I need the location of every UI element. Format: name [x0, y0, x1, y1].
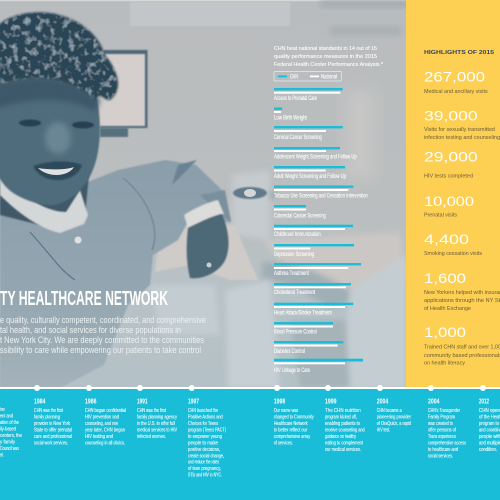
chart legend: CHN: [290, 74, 298, 80]
measure: diabetes control: [274, 341, 343, 355]
timeline entry: 2004 OraQuick: 2004: [377, 398, 388, 406]
stat: 39,000: Visits for sexually transmitted: [424, 127, 495, 133]
timeline entry: 2004 OraQuick: pioneering provider: [377, 414, 411, 420]
panel: yellow highlights background: [406, 0, 500, 388]
stat: 1,000: 1,000: [424, 324, 466, 340]
measure: heart attack and stroke treatment: Heart Attack/Stroke Treatment: [274, 310, 332, 317]
timeline entry: founding (cut off): ation of the: [0, 420, 19, 426]
timeline entry: 1998: 1998: [274, 398, 285, 406]
stat: 10,000: [424, 193, 474, 219]
timeline entry: 1998: [274, 398, 314, 446]
timeline entry: 1986: CHN began confidential: [85, 408, 126, 414]
timeline entry: 1998: Our name was: [274, 408, 298, 414]
measure: adolescent weight screening: Adolescent Weight Screening and Follow Up: [274, 154, 357, 161]
timeline entry: 1998: of services.: [274, 440, 293, 446]
timeline entry: 1986: year later, CHN began: [85, 428, 125, 434]
timeline entry: 1999: guidance on healthy: [325, 434, 356, 440]
timeline entry: 2004 Transgender program: Family Program: [428, 414, 455, 420]
timeline entry: founding (cut off): ent and: [0, 414, 13, 420]
timeline entry: 1991: 1991: [137, 398, 148, 406]
timeline entry: 1997: positive decisions,: [188, 447, 220, 453]
timeline entry: 2004 Transgender program: [427, 398, 466, 460]
measure: HIV linkage to care: HIV Linkage to Care: [274, 367, 310, 374]
measure: depression screening: Depression Screening: [274, 251, 314, 258]
stat: 1,600: of Health Exchange: [424, 306, 471, 312]
timeline entry: 1986: counseling in all clinics.: [85, 440, 125, 446]
timeline entry: 1984: care and professional: [34, 434, 72, 440]
stat: 4,400: 4,400: [424, 231, 469, 247]
measure: adult weight screening: [274, 166, 346, 180]
timeline entry: 1999: our medical services.: [325, 447, 361, 453]
timeline entry: 2004 Transgender program: comprehensive access: [428, 440, 466, 446]
timeline entry: 1999: enabling patients to: [325, 421, 360, 427]
stat: 29,000: [424, 149, 478, 180]
measure: HIV linkage to care: [274, 359, 363, 374]
measure: tobacco use screening: [274, 186, 368, 200]
timeline entry: 1997: create social change,: [188, 454, 224, 460]
mission paragraph: t New York City. We are deeply committed to the communities: [0, 335, 205, 345]
timeline entry: 2004 Transgender program: CHN's Transgender: [428, 408, 460, 414]
timeline entry: 2012 (cut off): [479, 398, 500, 453]
timeline entry: 1998: Healthcare Network: [274, 421, 308, 427]
timeline entry: 1997: CHN launched the: [188, 408, 218, 414]
timeline entry: 1984: family planning: [34, 414, 60, 420]
performance intro text: Federal Health Center Performance Analysis.*: [274, 62, 384, 68]
stat: 1,000: community based professionals: [424, 353, 500, 359]
timeline entry: 2004 OraQuick: of OraQuick, a rapid: [377, 421, 411, 427]
stat: 1,600: 1,600: [424, 270, 466, 286]
timeline entry: founding (cut off): ed.: [0, 452, 4, 458]
timeline entry: 1999: 1999: [325, 398, 337, 406]
heading: community healthcare network: TY HEALTHCARE NETWORK: [0, 288, 168, 310]
timeline entry: 1998: changed to Community: [274, 414, 314, 420]
measure: colorectal cancer screening: Colorectal Cancer Screening: [274, 212, 326, 219]
timeline entry: 2012 (cut off): 2012: [479, 398, 489, 406]
stat: 267,000: Medical and ancillary visits: [424, 89, 488, 95]
timeline entry: 1999: eating to complement: [325, 440, 363, 446]
chart legend: National: [321, 74, 337, 80]
measure: tobacco use screening: Tobacco Use Screening and Cessation Intervention: [274, 193, 368, 200]
timeline entry: 1984: CHN was the first: [34, 408, 63, 414]
timeline entry: 1991: family planning agency: [137, 414, 177, 420]
measure: low birth weight: Low Birth Weight: [274, 115, 307, 122]
stat: 10,000: 10,000: [424, 193, 474, 209]
timeline entry: 1986: [85, 398, 126, 446]
stat: 1,000: [424, 324, 500, 367]
timeline entry: 1986: 1986: [85, 398, 97, 406]
timeline entry: 1984: [34, 398, 72, 446]
timeline entry: 2004 OraQuick: HIV test.: [377, 428, 390, 434]
timeline entry: 1986: HIV prevention and: [85, 414, 119, 420]
measure: cervical cancer screening: [274, 126, 343, 141]
measure: childhood immunization: [274, 225, 353, 238]
timeline entry: 1997: program (Teens PACT): [188, 428, 226, 434]
measure: colorectal cancer screening: [274, 205, 326, 219]
stat: 4,400: [424, 231, 482, 257]
timeline entry: founding (cut off): hen: [0, 407, 5, 413]
stat: 29,000: 29,000: [424, 149, 478, 165]
measure: diabetes control: Diabetes Control: [274, 348, 305, 355]
timeline entry: 1997: STIs and HIV in NYC.: [188, 472, 222, 478]
timeline entry: 1984: provider in New York: [34, 421, 70, 427]
timeline band: [0, 389, 500, 500]
measure: asthma treatment: [274, 263, 361, 277]
measure: depression screening: [274, 244, 354, 258]
timeline entry: 2004 Transgender program: 2004: [428, 398, 440, 406]
timeline entry: 1997: and reduce the rates: [188, 460, 219, 466]
timeline entry: 1984: State to offer prenatal: [34, 428, 72, 434]
measure: cervical cancer screening: Cervical Cancer Screening: [274, 134, 322, 141]
performance intro text: CHN beat national standards in 14 out of 15: [274, 46, 377, 52]
timeline entry: 1991: in the U.S. to offer full: [137, 421, 175, 427]
chart legend: [274, 72, 342, 81]
stat: 29,000: HIV tests completed: [424, 174, 473, 180]
timeline entry: 2004 Transgender program: Trans experience: [428, 434, 456, 440]
measure: blood pressure control: [274, 322, 333, 336]
timeline entry: 1999: receive counseling and: [325, 428, 365, 434]
timeline line and year markers: [0, 385, 500, 391]
timeline entry: 1991: medical services to HIV: [137, 428, 177, 434]
timeline entry: 1999: The CHN nutrition: [325, 408, 361, 414]
measure: cholesterol treatment: [274, 283, 351, 296]
timeline entry: founding (cut off): y family: [0, 440, 15, 446]
timeline entry: 2004 Transgender program: to healthcare and: [428, 447, 458, 453]
stat: 39,000: 39,000: [424, 108, 478, 124]
timeline entry: 1999: [325, 398, 365, 453]
timeline entry: founding (cut off): [0, 407, 22, 458]
measure: access to prenatal care: [274, 88, 343, 102]
timeline entry: 1997: Choices for Teens: [188, 421, 218, 427]
measure: adult weight screening: Adult Weight Screening and Follow Up: [274, 173, 346, 180]
timeline entry: 2004 OraQuick: [377, 398, 411, 434]
performance intro text: [274, 46, 384, 68]
timeline entry: 2004 Transgender program: offer persons of: [428, 428, 456, 434]
timeline entry: 1999: program kicked off,: [325, 414, 357, 420]
timeline entry: 1984: 1984: [34, 398, 46, 406]
timeline entry: 1997: 1997: [188, 398, 199, 406]
timeline entry: 1991: [137, 398, 177, 440]
stat: 1,600: [424, 270, 500, 312]
measure: cholesterol treatment: Cholesterol Treatment: [274, 289, 315, 296]
timeline entry: 2004 OraQuick: CHN became a: [377, 408, 402, 414]
stat: 39,000: [424, 108, 500, 141]
timeline entry: 1997: Positive Actions and: [188, 414, 223, 420]
measure: asthma treatment: Asthma Treatment: [274, 270, 309, 277]
timeline entry: 1991: CHN was the first: [137, 408, 166, 414]
measure: access to prenatal care: Access to Prenatal Care: [274, 95, 317, 102]
timeline entry: founding (cut off): ily-based: [0, 426, 16, 432]
stat: 267,000: [424, 69, 488, 95]
measure: blood pressure control: Blood Pressure Control: [274, 329, 317, 336]
timeline entry: 1997: to empower young: [188, 434, 222, 440]
stat: 1,000: on health literacy: [424, 361, 465, 367]
timeline entry: 2004 Transgender program: was created to: [427, 421, 453, 427]
measure: adolescent weight screening: [274, 147, 357, 161]
measure: childhood immunization: Childhood Immunization: [274, 231, 321, 238]
mission paragraph: tal health, and social services for diverse populations in: [0, 325, 181, 335]
timeline entry: 1984: social work services.: [34, 440, 68, 446]
timeline entry: founding (cut off): centers, the: [0, 433, 22, 439]
performance intro text: quality performance measures in the 2015: [274, 54, 377, 60]
measure: low birth weight: [274, 108, 307, 122]
timeline entry: 1986: HIV testing and: [85, 434, 113, 440]
mission paragraph: [0, 315, 206, 355]
mission paragraph: e quality, culturally competent, coordinated, and comprehensive: [0, 315, 206, 325]
timeline entry: founding (cut off): Council was: [0, 446, 19, 452]
bar chart: CHN vs national quality measures: [274, 88, 368, 374]
stat: 10,000: Prenatal visits: [424, 213, 457, 219]
photo: smiling healthcare worker in a clinic: [0, 0, 410, 388]
mission paragraph: ssibility to care while empowering our patients to take control: [0, 345, 201, 355]
timeline entry: 1991: infected women.: [137, 434, 166, 440]
stat: 4,400: Smoking cessation visits: [424, 251, 482, 257]
highlights heading: HIGHLIGHTS OF 2015: [424, 50, 494, 56]
timeline entry: 1997: people to make: [188, 440, 218, 446]
timeline entry: 1998: to better reflect our: [274, 428, 307, 434]
measure: heart attack and stroke treatment: [274, 303, 353, 317]
timeline entry: 1998: comprehensive array: [274, 434, 310, 440]
stat: 39,000: infection testing and counseling: [424, 135, 500, 141]
timeline entry: 1997: [188, 398, 226, 478]
timeline entry: 2004 Transgender program: social services.: [428, 454, 453, 460]
stat: 267,000: 267,000: [424, 69, 485, 85]
timeline entry: 1997: of teen pregnancy,: [188, 466, 221, 472]
timeline entry: 1986: counseling, and one: [85, 421, 118, 427]
